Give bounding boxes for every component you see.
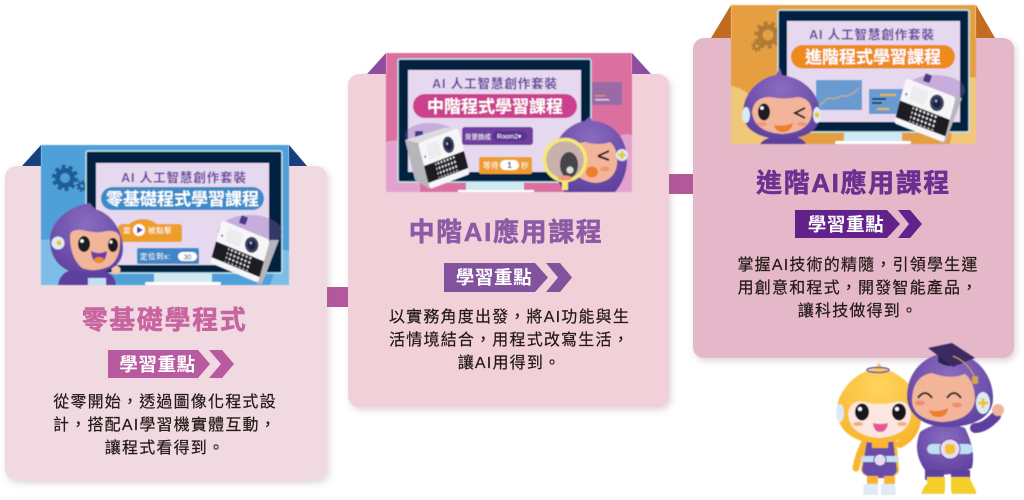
code block: wait	[479, 157, 532, 174]
screen subtitle: AI 人工智慧創作套裝	[809, 27, 935, 42]
course pill: intermediate: 中階程式學習課程	[427, 98, 563, 116]
screen subtitle: AI 人工智慧創作套裝	[432, 76, 558, 91]
image flaps: orange	[711, 5, 995, 38]
course pill: beginner: 零基礎程式學習課程	[106, 190, 259, 209]
course image: advanced	[731, 5, 976, 144]
body text: advanced: 讓科技做得到。	[798, 301, 918, 320]
code block: wait: 等待	[483, 160, 499, 170]
panel: beginner course	[5, 145, 327, 480]
body text: advanced: 用創意和程式，開發智能產品，	[738, 278, 978, 297]
mascot: purple boy with graduation cap	[907, 343, 1004, 498]
screen subtitle: AI 人工智慧創作套裝	[121, 170, 247, 185]
badge: learning focus: 學習重點	[456, 267, 532, 288]
line chart	[816, 80, 862, 110]
panel: advanced course	[693, 5, 1014, 358]
connector: level 1 to 2	[325, 287, 349, 307]
code block: wait: 1	[507, 161, 512, 170]
monitor	[398, 59, 591, 192]
course pill: advanced: 進階程式學習課程	[805, 48, 941, 67]
icon: gears	[54, 166, 87, 191]
code block: when clicked: 當	[123, 226, 131, 235]
body text: intermediate	[389, 307, 630, 372]
body text: intermediate: 活情境結合，用程式改寫生活，	[389, 330, 630, 349]
device: AI learning board	[405, 123, 470, 189]
badge: learning focus	[795, 210, 922, 238]
badge: learning focus	[444, 263, 572, 292]
course pill: intermediate	[413, 94, 577, 118]
badge: learning focus: 學習重點	[808, 214, 884, 235]
heading: intermediate: 中階AI應用課程	[409, 217, 603, 247]
code block: switch backdrop: 背景換成	[465, 132, 492, 141]
icon: gears	[752, 23, 780, 51]
body text: beginner	[53, 393, 277, 457]
monitor	[86, 151, 282, 285]
mascots: yellow and purple pair	[836, 343, 1004, 498]
code block: go to x: 30	[184, 254, 191, 262]
code block: when clicked: 被點擊	[148, 225, 172, 235]
connector: level 2 to 3	[668, 174, 694, 194]
panel: intermediate course	[348, 53, 669, 407]
code block: switch backdrop: Room2▾	[497, 134, 522, 140]
code block: switch backdrop	[462, 127, 533, 145]
body text: beginner: 讓程式看得到。	[105, 438, 225, 457]
course image: beginner	[41, 145, 289, 285]
card: advanced	[693, 38, 1014, 358]
mascot: purple, happy	[50, 203, 123, 285]
image flaps: purple	[367, 53, 651, 74]
card: intermediate	[348, 74, 669, 407]
heading: advanced: 進階AI應用課程	[756, 168, 951, 198]
body text: intermediate: 以實務角度出發，將AI功能與生	[389, 307, 630, 326]
badge: learning focus: 學習重點	[119, 354, 196, 375]
code card: background	[592, 82, 622, 105]
heading: beginner: 零基礎學程式	[82, 305, 247, 335]
card: beginner	[5, 166, 327, 480]
body text: intermediate: 讓AI用得到。	[458, 353, 561, 372]
code block: when clicked	[118, 219, 182, 242]
mascot: purple with magnifier	[544, 116, 628, 192]
badge: learning focus	[108, 350, 234, 378]
code card	[869, 89, 904, 114]
code block: wait: 秒	[521, 160, 529, 170]
code block: go to x: 定位到x:	[140, 251, 171, 261]
image flaps: blue	[22, 145, 307, 166]
body text: beginner: 從零開始，透過圖像化程式設	[53, 393, 277, 411]
body text: advanced: 掌握AI技術的精隨，引領學生運	[737, 256, 979, 274]
course pill: advanced	[791, 45, 955, 68]
mascot: purple, winking	[742, 68, 821, 144]
device: AI learning board	[210, 215, 282, 284]
device: AI learning board	[894, 73, 965, 143]
code block: go to x	[137, 248, 199, 264]
monitor	[778, 10, 969, 144]
body text: advanced	[737, 256, 979, 320]
course image: intermediate	[386, 53, 632, 192]
mascot: yellow girl	[836, 363, 921, 495]
body text: beginner: 計，搭配AI學習機實體互動，	[53, 415, 277, 434]
